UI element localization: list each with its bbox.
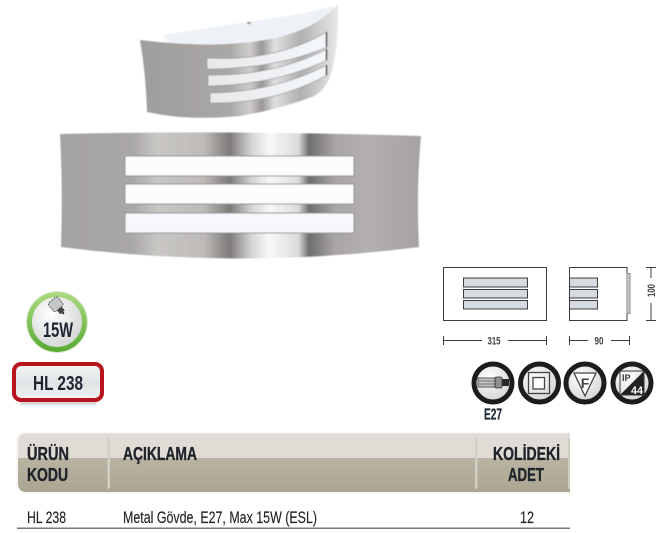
table header band — [16, 432, 570, 494]
product photo: angled lamp view — [140, 4, 338, 118]
icon: class II double insulation — [520, 364, 558, 402]
dimension: height 100: 100 — [646, 284, 658, 297]
icon: F mark triangle: F — [581, 375, 590, 391]
icon: IP44 rating: IP — [622, 373, 631, 383]
cell: units per box: 12 — [520, 508, 534, 527]
dimension: width 315: 315 — [488, 336, 500, 348]
icon: 15W lamp power badge — [26, 292, 88, 352]
icon: energy-saving bulb — [48, 296, 68, 318]
label: E27: E27 — [484, 406, 502, 424]
product photo: front lamp view — [60, 132, 421, 258]
table row: HL 238 — [17, 508, 570, 529]
column heading: units per box: ADET — [508, 465, 544, 485]
dimension: height 100 — [646, 268, 658, 320]
dimension: depth 90 — [570, 336, 630, 348]
technical drawing: side view — [570, 268, 630, 320]
column heading: description: AÇIKLAMA — [123, 444, 197, 464]
icon: E27 lamp socket — [474, 364, 512, 402]
dimension: depth 90: 90 — [594, 336, 604, 348]
cell: description: Metal Gövde, E27, Max 15W (ESL) — [123, 508, 317, 527]
dimension: width 315 — [444, 336, 546, 348]
icon: IP44 rating: 44 — [631, 385, 644, 397]
icon: F mark triangle — [566, 364, 604, 402]
product code button: HL 238: HL 238 — [33, 373, 83, 395]
label: 15W: 15W — [43, 319, 73, 342]
column heading: units per box: KOLİDEKİ — [493, 444, 560, 464]
icon: IP44 rating — [613, 364, 651, 402]
cell: product code: HL 238 — [27, 508, 66, 527]
technical drawing: front view — [444, 268, 546, 320]
column heading: product code: KODU — [27, 465, 68, 485]
product code button: HL 238 — [14, 364, 102, 405]
column heading: product code: ÜRÜN — [27, 444, 69, 464]
